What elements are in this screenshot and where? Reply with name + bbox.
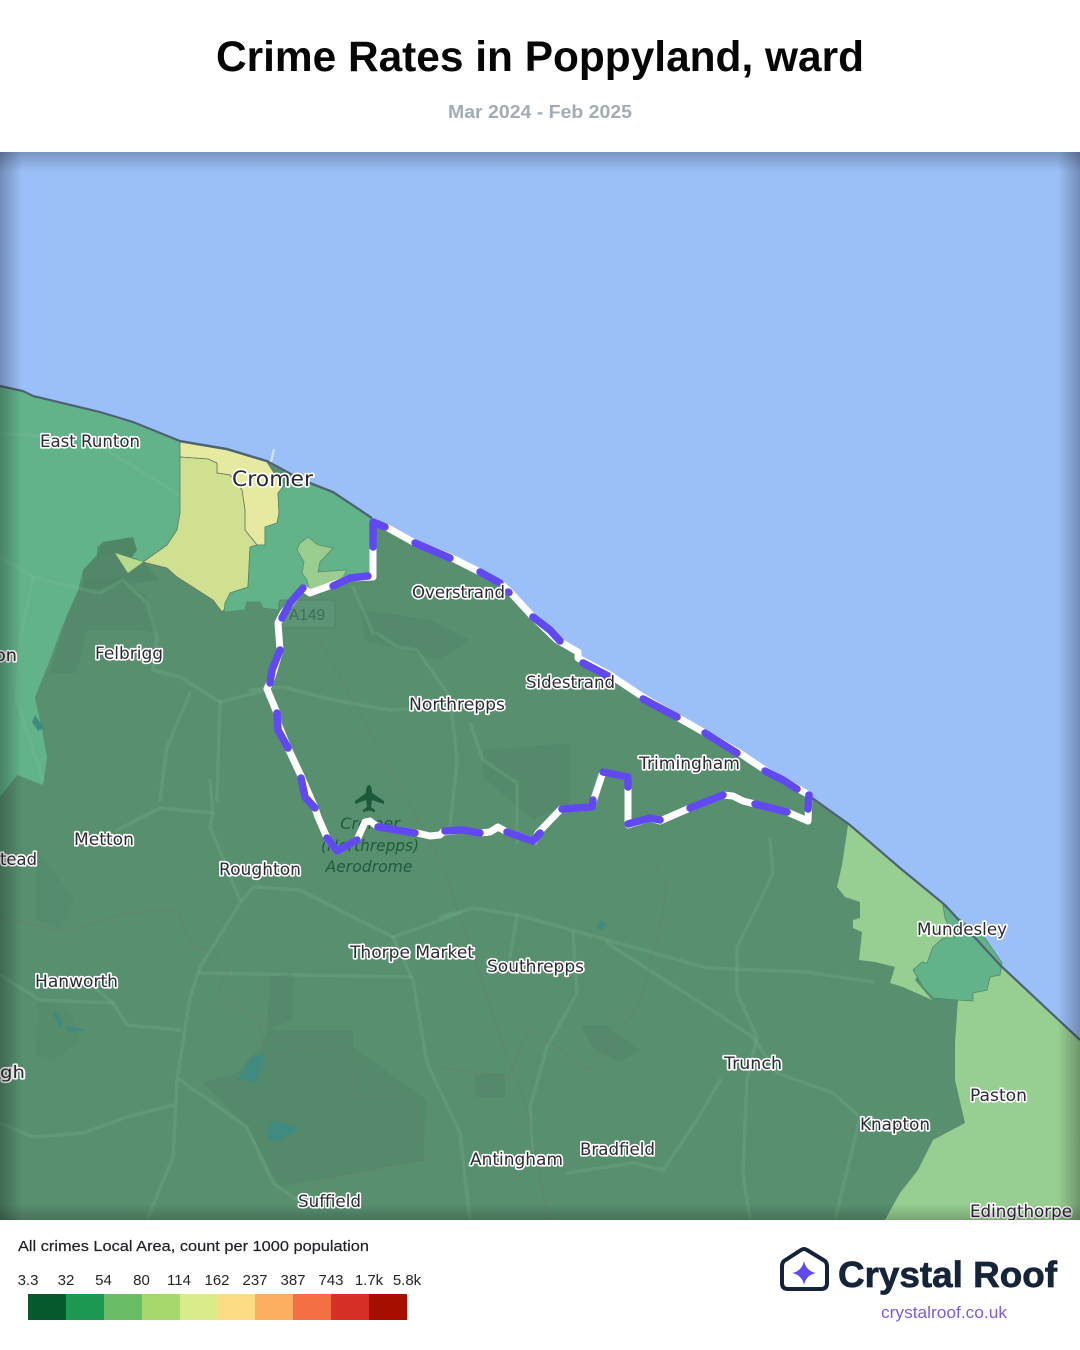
road sign A149: A149 bbox=[289, 607, 325, 624]
place name labels: gh bbox=[0, 1063, 25, 1082]
legend scale values: 3.3 bbox=[18, 1272, 38, 1289]
place name labels: Southrepps bbox=[487, 957, 584, 976]
place name labels: Paston bbox=[970, 1086, 1027, 1105]
forest patches bbox=[83, 537, 137, 589]
place name labels: Mundesley bbox=[917, 920, 1007, 939]
legend scale values: 162 bbox=[204, 1272, 230, 1289]
legend scale values: 387 bbox=[280, 1272, 306, 1289]
map edge shading bbox=[0, 152, 1080, 1220]
east Cromer inner ward: light green bbox=[297, 537, 347, 592]
place name labels: Antingham bbox=[470, 1150, 563, 1169]
legend scale values bbox=[18, 1272, 422, 1289]
ward outline: white dashed route bbox=[267, 522, 809, 851]
legend scale values: 1.7k bbox=[355, 1272, 384, 1289]
aerodrome label: (Northrepps) bbox=[321, 836, 419, 855]
Cromer ward: yellow green bbox=[143, 457, 257, 612]
land: main ward colour bbox=[0, 387, 965, 1220]
place name labels: Suffield bbox=[298, 1192, 361, 1211]
place name labels: tead bbox=[0, 850, 37, 869]
legend colour bar bbox=[28, 1294, 407, 1320]
place name labels bbox=[0, 432, 1072, 1221]
Cromer ward: pale yellow bbox=[180, 442, 283, 545]
pier spike bbox=[271, 449, 274, 462]
aerodrome label: Aerodrome bbox=[325, 857, 413, 876]
white base line bbox=[267, 522, 809, 851]
sea bbox=[0, 152, 1080, 1038]
legend scale values: 5.8k bbox=[393, 1272, 422, 1289]
place name labels: Bradfield bbox=[580, 1140, 655, 1159]
place name labels: Overstrand bbox=[412, 583, 505, 602]
Paston ward: light green bbox=[885, 905, 1080, 1220]
website url: crystalroof.co.uk bbox=[881, 1304, 1008, 1322]
title: Crime Rates in Poppyland, ward bbox=[216, 33, 864, 81]
place name labels: East Runton bbox=[40, 432, 140, 451]
place name labels: Trimingham bbox=[638, 754, 740, 773]
west triangle area bbox=[115, 553, 143, 573]
legend scale values: 237 bbox=[242, 1272, 268, 1289]
Mundesley outer ward: light green bbox=[837, 825, 944, 1000]
wordmark: Crystal Roof bbox=[838, 1254, 1058, 1295]
Mundesley centre ward: green bbox=[913, 905, 1002, 1001]
legend scale values: 114 bbox=[167, 1272, 191, 1289]
legend scale values: 32 bbox=[58, 1272, 74, 1289]
place name labels: Sidestrand bbox=[526, 673, 615, 692]
place name labels: Hanworth bbox=[35, 972, 118, 991]
icon: house outline with star bbox=[782, 1249, 827, 1289]
place name labels: Roughton bbox=[219, 860, 301, 879]
east Cromer ward: green bbox=[224, 480, 373, 613]
place name labels: Northrepps bbox=[409, 695, 505, 714]
roads bbox=[14, 575, 957, 1216]
place name labels: Thorpe Market bbox=[349, 943, 475, 962]
subtitle: date range: Mar 2024 - Feb 2025 bbox=[448, 101, 632, 122]
icon: airplane bbox=[355, 785, 384, 812]
legend scale values: 80 bbox=[133, 1272, 150, 1289]
place name labels: Metton bbox=[74, 830, 134, 849]
legend scale values: 54 bbox=[95, 1272, 112, 1289]
aerodrome label: Cromer bbox=[340, 814, 401, 833]
aerodrome label bbox=[322, 818, 418, 872]
land: western area bbox=[0, 387, 180, 797]
road sign A149 bbox=[279, 600, 335, 628]
legend scale values: 743 bbox=[318, 1272, 344, 1289]
place name labels: Edingthorpe bbox=[970, 1202, 1072, 1221]
map panel bbox=[0, 152, 1080, 1221]
place name labels: Knapton bbox=[860, 1115, 930, 1134]
place name labels: Felbrigg bbox=[95, 644, 163, 663]
purple dashes bbox=[270, 522, 809, 851]
place name labels: Cromer bbox=[232, 467, 313, 491]
water bodies bbox=[32, 715, 606, 1142]
parish boundaries bbox=[0, 640, 667, 1220]
legend title: All crimes Local Area, count per 1000 population bbox=[18, 1238, 369, 1255]
coastline bbox=[0, 386, 1080, 1040]
legend bbox=[18, 1238, 422, 1320]
brand logo bbox=[782, 1249, 1058, 1322]
place name labels: Trunch bbox=[723, 1054, 782, 1073]
